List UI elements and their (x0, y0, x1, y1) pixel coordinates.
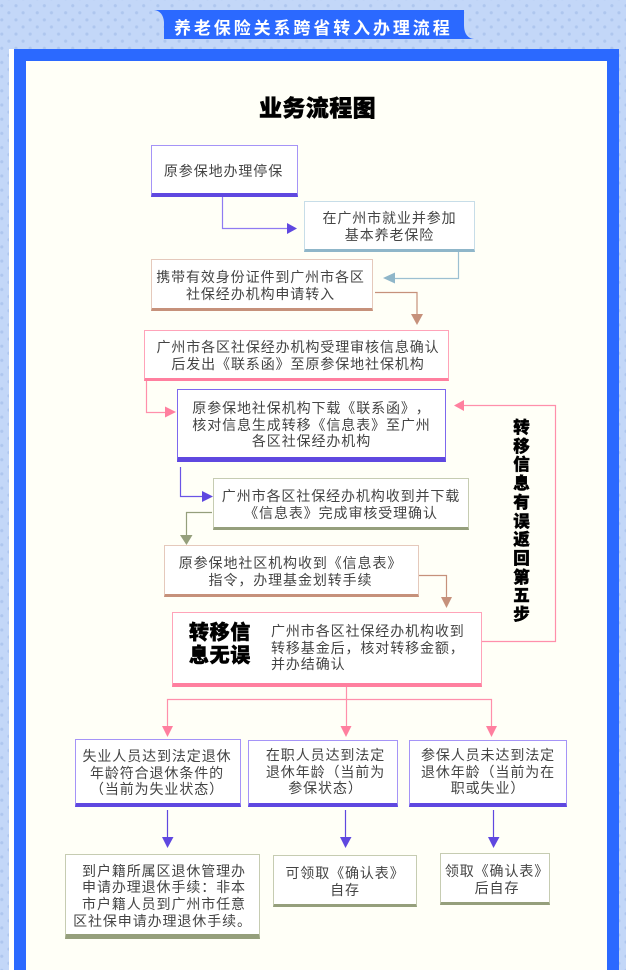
label: transfer info correct (189, 621, 251, 667)
step 2 box (304, 201, 475, 252)
step 5 box: 原参保地社保机构下载《联系函》， (192, 400, 431, 416)
arrow: step 6 to 7 (180, 512, 212, 545)
step 5 box (177, 389, 446, 462)
step 4 box: 广州市各区社保经办机构受理审核信息确认 (156, 339, 440, 355)
step 8 text: 广州市各区社保经办机构收到 (271, 623, 465, 639)
vertical label: error returns to step 5: 息 (513, 475, 530, 493)
step 3 box (151, 259, 373, 311)
step 7 box (164, 545, 419, 597)
result 1 box: 申请办理退休手续：非本 (82, 879, 246, 895)
result 3 box: 领取《确认表》 (445, 863, 549, 879)
vertical label: error returns to step 5 (513, 418, 530, 624)
vertical label: error returns to step 5: 返 (513, 531, 530, 549)
arrow: branch to three outcomes (162, 687, 497, 737)
heading: flow chart: 业务流程图 (259, 95, 376, 121)
step 3 box: 社保经办机构申请转入 (186, 286, 335, 302)
step 3 box: 携带有效身份证件到广州市各区 (156, 269, 365, 285)
arrow: step 5 to 6 (180, 467, 213, 502)
vertical label: error returns to step 5: 五 (513, 587, 530, 605)
step 8 text: 转移基金后，核对转移金额， (271, 640, 465, 656)
outcome 3 box: 参保人员未达到法定 (421, 747, 555, 763)
title banner (154, 10, 474, 39)
arrow: step 1 to 2 (222, 197, 297, 234)
step 2 box: 基本养老保险 (345, 227, 434, 243)
label: transfer info correct: 息无误 (189, 645, 251, 667)
outcome 2 box (248, 740, 398, 807)
step 1 box (151, 145, 298, 197)
outcome 1 box: 年龄符合退休条件的 (90, 765, 224, 781)
step 8 text: 并办结确认 (271, 656, 346, 672)
result 3 box: 后自存 (475, 880, 519, 896)
result 3 box (440, 853, 550, 905)
step 8 box (172, 612, 482, 687)
step 7 box: 原参保地社区机构收到《信息表》 (179, 555, 402, 571)
outcome 2 box: 参保状态） (288, 780, 363, 796)
step 5 box: 各区社保经办机构 (252, 433, 371, 449)
result 2 box: 可领取《确认表》 (285, 865, 405, 881)
outcome 3 box (409, 740, 567, 807)
white edge strip (9, 49, 14, 970)
step 4 box (144, 330, 449, 381)
arrow: outcome 1 down (162, 810, 174, 848)
vertical label: error returns to step 5: 回 (513, 550, 530, 568)
outcome 2 box: 退休年龄（当前为 (266, 764, 385, 780)
step 6 box: 广州市各区社保经办机构收到并下载 (222, 488, 460, 504)
title banner: 养老保险关系跨省转入办理流程 (174, 19, 453, 38)
arrow: error feedback to step 5 (454, 400, 556, 642)
vertical label: error returns to step 5: 移 (513, 438, 530, 456)
outcome 1 box (75, 739, 241, 807)
arrow: step 2 to 3 (383, 252, 458, 284)
outcome 1 box: （当前为失业状态） (90, 781, 224, 797)
outcome 1 box: 失业人员达到法定退休 (82, 748, 232, 764)
outcome 3 box: 退休年龄（当前为在 (421, 764, 555, 780)
step 2 box: 在广州市就业并参加 (322, 210, 457, 226)
vertical label: error returns to step 5: 步 (513, 606, 530, 624)
result 1 box: 市户籍人员到广州市任意 (82, 896, 246, 912)
step 7 box: 指令，办理基金划转手续 (209, 572, 372, 588)
vertical label: error returns to step 5: 转 (513, 419, 530, 437)
outcome 2 box: 在职人员达到法定 (266, 747, 385, 763)
step 4 box: 后发出《联系函》至原参保地社保机构 (171, 356, 425, 372)
outcome 3 box: 职或失业） (451, 780, 525, 796)
vertical label: error returns to step 5: 误 (513, 513, 530, 531)
arrow: step 3 to 4 (375, 292, 423, 325)
step 6 box (213, 478, 469, 530)
result 2 box: 自存 (330, 882, 360, 898)
step 6 box: 《信息表》完成审核受理确认 (244, 504, 438, 520)
vertical label: error returns to step 5: 信 (513, 456, 530, 474)
arrow: outcome 3 down (488, 810, 500, 848)
result 1 box (65, 854, 260, 939)
arrow: outcome 2 down (340, 810, 352, 848)
result 1 box: 到户籍所属区退休管理办 (82, 863, 246, 879)
result 2 box (273, 855, 417, 907)
vertical label: error returns to step 5: 有 (513, 494, 530, 512)
step 1 box: 原参保地办理停保 (164, 163, 283, 179)
arrow: step 4 to 5 (146, 381, 176, 418)
arrow: step 7 to 8 (419, 576, 452, 608)
step 5 box: 核对信息生成转移《信息表》至广州 (192, 417, 431, 433)
result 1 box: 区社保申请办理退休手续。 (73, 913, 252, 929)
vertical label: error returns to step 5: 第 (513, 569, 530, 587)
label: transfer info correct: 转移信 (189, 622, 251, 644)
step 8 text (271, 623, 465, 672)
